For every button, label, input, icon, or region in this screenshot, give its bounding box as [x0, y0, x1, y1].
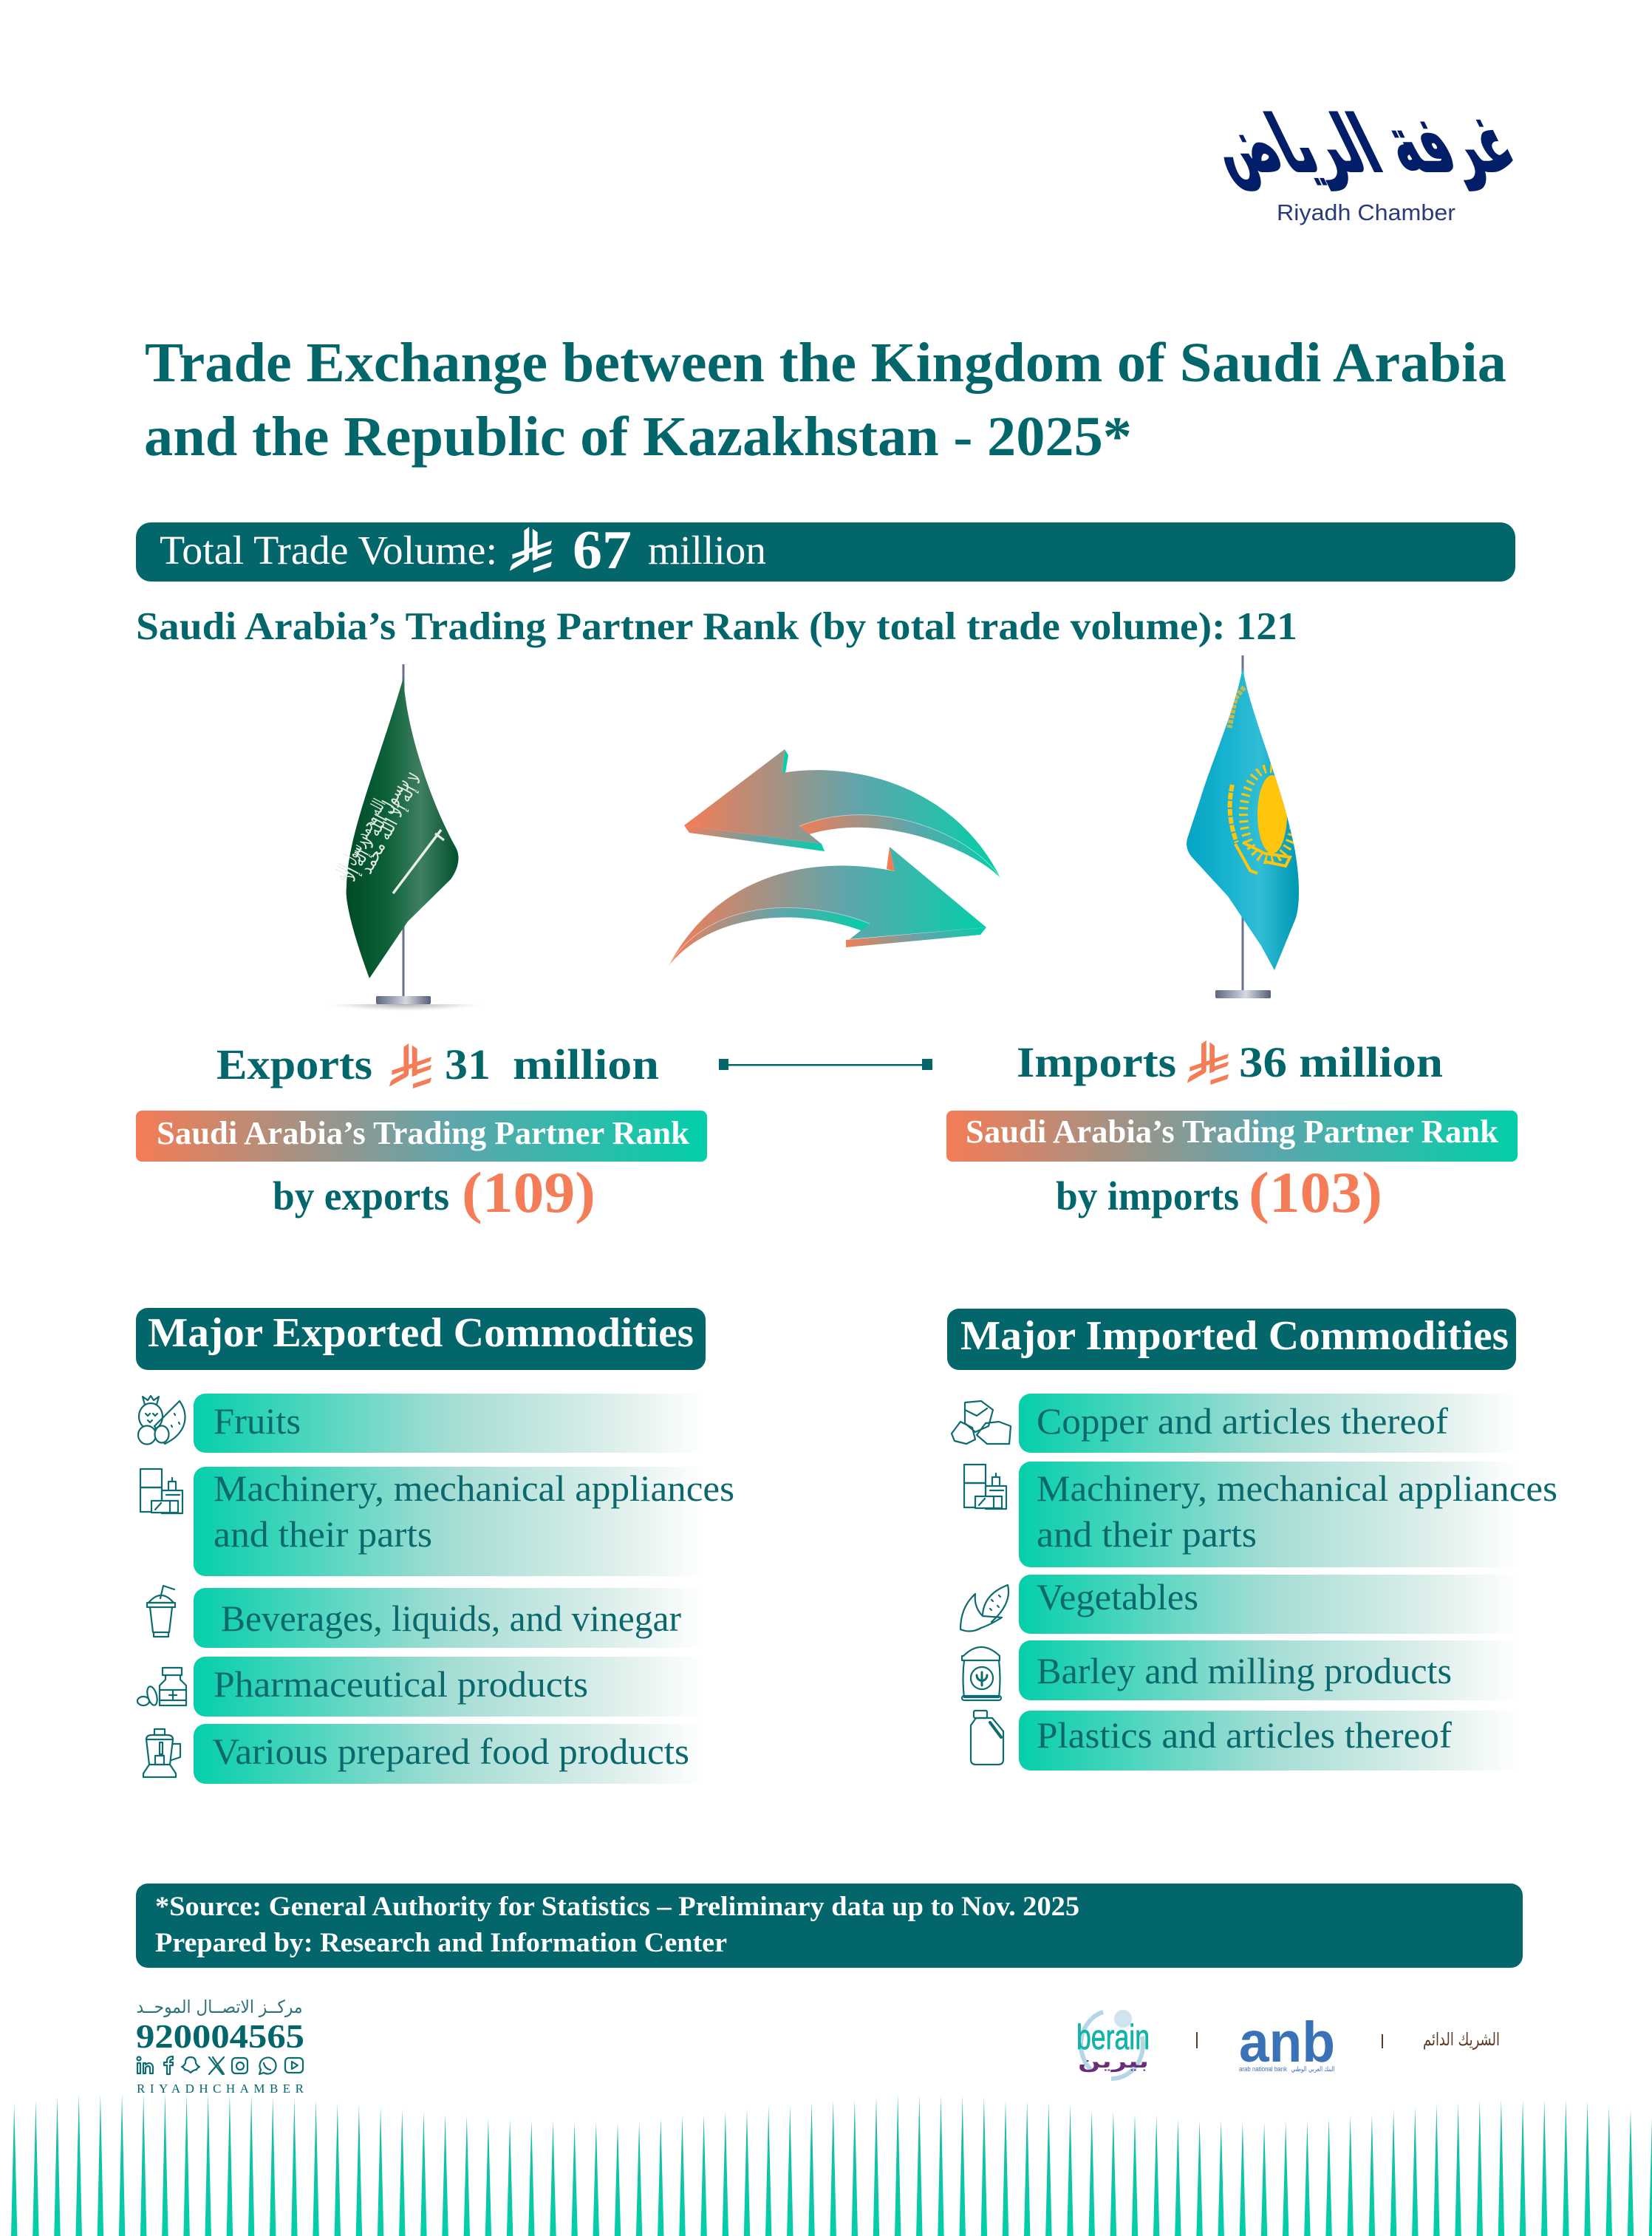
row: machinery: Machinery, mechanical appliances [1037, 1468, 1557, 1509]
row: vegetables [960, 1575, 1519, 1634]
separator [1382, 2034, 1383, 2048]
title [144, 332, 1506, 468]
logo: arab national bank: anb [1239, 2011, 1335, 2074]
icon: riyal symbol orange [1187, 1040, 1229, 1085]
imports heading: Imports [1017, 1038, 1176, 1086]
icon: fruits [138, 1396, 185, 1444]
icon: corn [960, 1585, 1008, 1632]
icon: cup [147, 1586, 175, 1637]
icon: riyal symbol orange [389, 1043, 431, 1088]
flag: Saudi Arabia: رسول الله لا إله إلا [339, 774, 412, 885]
row: prepared food [143, 1724, 705, 1784]
icon: copper rocks [952, 1401, 1011, 1444]
icon: sack [962, 1647, 1001, 1700]
heading: imported: Major Imported Commodities [960, 1313, 1509, 1359]
exports rank panel: (109) [462, 1160, 595, 1224]
total trade volume bar [136, 520, 1515, 582]
source and credits bar: Prepared by: Research and Information Center [155, 1928, 727, 1958]
contact block [136, 1997, 304, 2096]
icon: appliances [140, 1469, 182, 1513]
icon: appliances [964, 1465, 1006, 1509]
logo: arab national bank: arab national bank [1239, 2065, 1287, 2073]
title: and the Republic of Kazakhstan - 2025* [144, 406, 1132, 468]
arrow: from Kazakhstan to Saudi Arabia [684, 749, 1000, 878]
decorative spikes [11, 2093, 1652, 2236]
panel: major imported commodities [947, 1309, 1557, 1770]
contact block: مركــز الاتصــال الموحــد [136, 1997, 303, 2017]
flag: Saudi Arabia: لا إله إلا الله محمد [355, 769, 426, 878]
row: pharmaceutical [137, 1657, 705, 1717]
row: fruits: Fruits [214, 1400, 301, 1442]
icon: riyal symbol white [510, 527, 552, 573]
imports rank panel: by imports [1056, 1173, 1239, 1218]
connector between exports and imports [719, 1059, 932, 1070]
heading: exported [136, 1308, 706, 1370]
row: fruits [138, 1394, 705, 1453]
flag: Kazakhstan [1187, 655, 1299, 998]
imports rank panel: (103) [1249, 1160, 1382, 1224]
total trade volume bar: Total Trade Volume: [160, 528, 497, 573]
row: beverages: Beverages, liquids, and vinegar [221, 1598, 681, 1639]
row: copper [952, 1394, 1519, 1453]
row: barley [962, 1640, 1519, 1700]
source and credits bar: *Source: General Authority for Statistics – Preliminary data up to Nov. 2025 [155, 1892, 1079, 1922]
flag: Saudi Arabia [321, 664, 488, 1019]
exports rank panel [136, 1111, 707, 1224]
total trade volume bar: 67 [573, 520, 632, 581]
logo: berain [1076, 2010, 1150, 2079]
logo: Riyadh Chamber [1191, 100, 1532, 225]
exports rank panel: by exports [273, 1173, 449, 1218]
exports rank panel: Saudi Arabia’s Trading Partner Rank [157, 1115, 690, 1151]
logo: Riyadh Chamber: Riyadh Chamber [1277, 200, 1455, 225]
source and credits bar [136, 1884, 1523, 1968]
exports heading: Exports [216, 1040, 372, 1088]
logo: berain: berain [1076, 2017, 1150, 2056]
row: machinery [964, 1462, 1557, 1567]
row: machinery: and their parts [1037, 1513, 1257, 1555]
contact block: 920004565 [136, 2017, 304, 2055]
row: plastics: Plastics and articles thereof [1037, 1714, 1452, 1756]
flag: Saudi Arabia: الله محمد رسول الله [330, 796, 389, 884]
imports rank panel: Saudi Arabia’s Trading Partner Rank [966, 1114, 1499, 1150]
row: vegetables: Vegetables [1037, 1576, 1198, 1618]
icon: plastic bottle [971, 1711, 1003, 1765]
exports heading: million [513, 1040, 659, 1088]
panel: major exported commodities [136, 1308, 734, 1784]
sponsor label: الشريك الدائم [1423, 2029, 1500, 2050]
separator [1196, 2032, 1198, 2048]
imports rank panel [946, 1111, 1518, 1224]
row: barley: Barley and milling products [1037, 1650, 1452, 1691]
social media icons [137, 2056, 303, 2074]
total trade volume bar: million [648, 528, 766, 573]
exports heading: 31 [445, 1040, 491, 1088]
row: pharmaceutical: Pharmaceutical products [214, 1663, 588, 1705]
row: plastics [971, 1711, 1519, 1770]
icon: blender [143, 1729, 180, 1777]
row: copper: Copper and articles thereof [1037, 1400, 1448, 1442]
row: machinery: and their parts [214, 1513, 432, 1555]
row: beverages [147, 1586, 705, 1648]
imports heading [1017, 1038, 1443, 1086]
title: Trade Exchange between the Kingdom of Saudi Arabia [145, 332, 1506, 394]
contact block: RIYADHCHAMBER [137, 2082, 304, 2096]
row: prepared food: Various prepared food products [212, 1731, 689, 1772]
heading: exported: Major Exported Commodities [148, 1310, 694, 1356]
imports heading: 36 million [1239, 1038, 1443, 1086]
exports heading [216, 1040, 659, 1088]
logo: berain: بيرين [1078, 2051, 1149, 2073]
arrow: from Saudi Arabia to Kazakhstan [669, 847, 986, 966]
row: machinery [140, 1467, 734, 1576]
logo: arab national bank: البنك العربي الوطني [1291, 2066, 1334, 2073]
icon: medicine [137, 1668, 186, 1706]
overall rank heading: Saudi Arabia’s Trading Partner Rank (by total trade volume): 121 [136, 605, 1297, 648]
row: machinery: Machinery, mechanical appliances [214, 1468, 734, 1509]
